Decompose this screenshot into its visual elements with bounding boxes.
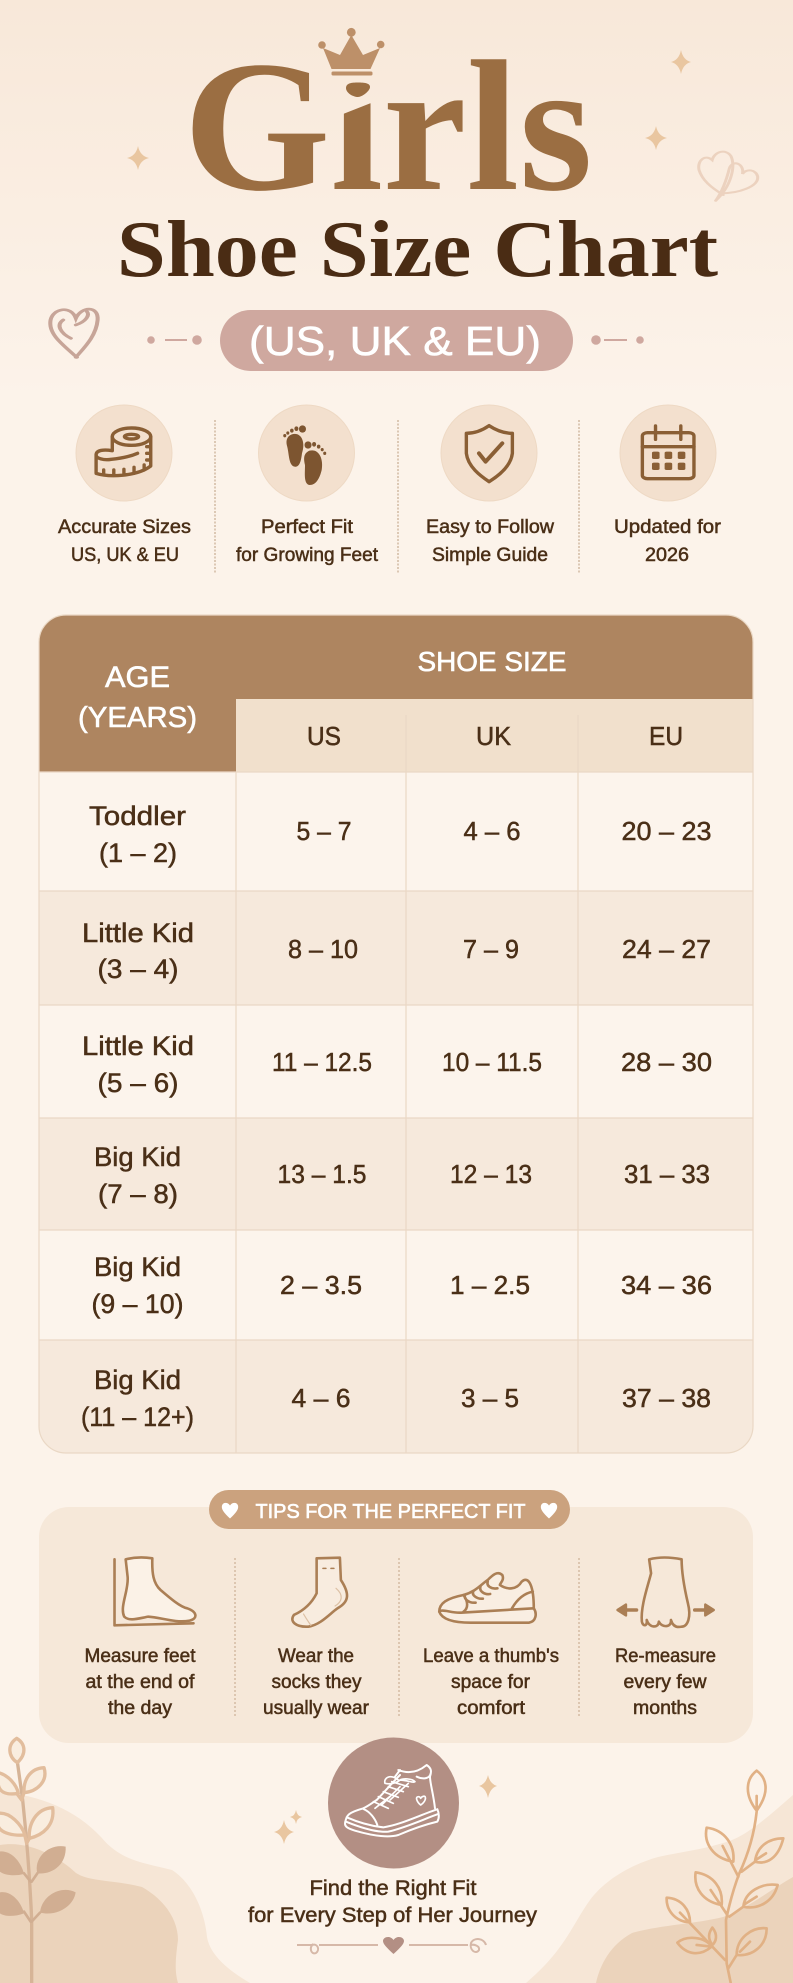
row: big kid 7-8: 13 – 1.5 xyxy=(278,1159,366,1189)
row: big kid 9-10: Big Kid xyxy=(94,1252,181,1282)
size table xyxy=(39,615,753,1453)
header: US UK EU xyxy=(307,721,683,751)
row: little kid 5-6: 28 – 30 xyxy=(621,1047,712,1077)
icon: sparkle bottom left xyxy=(274,1820,294,1844)
subtitle pill xyxy=(220,310,573,371)
row: little kid 3-4: 7 – 9 xyxy=(463,934,519,964)
header: age: (YEARS) xyxy=(78,702,197,734)
icon: sock xyxy=(292,1558,347,1627)
feature: accurate sizes xyxy=(58,405,191,566)
tip: socks xyxy=(263,1558,370,1719)
text: accurate sizes: US, UK & EU xyxy=(71,545,179,566)
text: socks: Wear the xyxy=(278,1646,354,1667)
icon: calendar xyxy=(642,426,694,479)
tip: measure feet xyxy=(84,1557,196,1719)
icon: sparkle bottom right xyxy=(479,1775,497,1798)
header: US UK EU: UK xyxy=(476,721,512,751)
row: big kid 11-12+: (11 – 12+) xyxy=(81,1402,194,1432)
text: socks: socks they xyxy=(272,1672,362,1693)
icon: crown over the i xyxy=(318,20,386,116)
row: toddler xyxy=(89,801,712,868)
text: perfect fit: Perfect Fit xyxy=(261,517,354,538)
row: big kid 9-10 xyxy=(92,1252,712,1319)
text: measure feet xyxy=(84,1646,196,1719)
tips heading pill: TIPS FOR THE PERFECT FIT xyxy=(256,1501,526,1523)
closing message xyxy=(248,1877,538,1927)
row: big kid 9-10: 34 – 36 xyxy=(621,1270,712,1300)
icon: sparkle left xyxy=(127,146,149,170)
table backgrounds and grid xyxy=(39,615,753,1453)
header: shoe size: SHOE SIZE xyxy=(418,646,566,677)
row: big kid 9-10: 2 – 3.5 xyxy=(280,1270,362,1300)
text: updated for 2026 xyxy=(614,517,722,566)
row: little kid 3-4 xyxy=(82,918,711,984)
text: updated for 2026: Updated for xyxy=(614,517,722,538)
text: re-measure: months xyxy=(633,1698,697,1719)
row: toddler: Toddler xyxy=(89,801,186,831)
closing message: Find the Right Fit xyxy=(310,1877,477,1900)
row: big kid 11-12+: 3 – 5 xyxy=(461,1383,519,1413)
text: easy to follow xyxy=(426,517,554,566)
icon: foot against ruler xyxy=(115,1557,195,1625)
icon: foot with arrows xyxy=(618,1558,714,1627)
text: socks xyxy=(263,1646,370,1719)
row: little kid 5-6: (5 – 6) xyxy=(98,1068,178,1098)
icon: high-top sneaker xyxy=(345,1765,439,1836)
row: toddler: 4 – 6 xyxy=(464,816,520,846)
row: big kid 9-10: (9 – 10) xyxy=(92,1289,184,1319)
row: big kid 7-8: Big Kid xyxy=(94,1142,181,1172)
badge: shoe circle xyxy=(328,1738,459,1868)
text: re-measure: Re-measure xyxy=(615,1646,716,1667)
text: thumb space xyxy=(423,1646,559,1719)
icon: sparkle right xyxy=(645,126,667,150)
feature: easy to follow xyxy=(426,405,554,566)
subtitle pill: (US, UK & EU) xyxy=(249,318,541,364)
icon: measuring tape xyxy=(96,428,151,476)
background blobs: bottom left xyxy=(0,1792,250,1983)
row: little kid 3-4: Little Kid xyxy=(82,918,194,948)
row: big kid 11-12+: 4 – 6 xyxy=(292,1383,350,1413)
feature: perfect fit xyxy=(236,405,379,566)
plant: left branch xyxy=(0,1738,76,1983)
row: little kid 5-6: 10 – 11.5 xyxy=(442,1047,542,1077)
header: US UK EU: EU xyxy=(649,721,683,751)
title: Girls: Girls xyxy=(183,23,593,230)
icon: double heart outline xyxy=(699,152,758,201)
row: little kid 5-6: 11 – 12.5 xyxy=(272,1047,372,1077)
row: little kid 5-6 xyxy=(82,1031,712,1098)
row: toddler: (1 – 2) xyxy=(99,838,177,868)
row: little kid 3-4: 8 – 10 xyxy=(288,934,358,964)
ornament: right of subtitle xyxy=(591,335,644,345)
ornament: left of subtitle xyxy=(147,335,202,345)
text: perfect fit xyxy=(236,517,379,566)
text: measure feet: at the end of xyxy=(86,1672,195,1693)
text: thumb space: space for xyxy=(451,1672,531,1693)
title: Shoe Size Chart: Shoe Size Chart xyxy=(117,206,718,294)
row: big kid 7-8: 12 – 13 xyxy=(450,1159,532,1189)
tips heading pill xyxy=(209,1490,570,1529)
row: big kid 7-8 xyxy=(94,1142,710,1209)
row: toddler: 20 – 23 xyxy=(622,816,712,846)
text: thumb space: Leave a thumb's xyxy=(423,1646,559,1667)
text: thumb space: comfort xyxy=(457,1698,526,1719)
row: toddler: 5 – 7 xyxy=(296,816,352,846)
background blobs: bottom right xyxy=(526,1795,793,1983)
icon: sparkle top right xyxy=(671,50,691,74)
ornament: heart divider xyxy=(297,1937,486,1954)
header: US UK EU: US xyxy=(307,721,341,751)
panel: tips xyxy=(39,1490,753,1743)
row: big kid 11-12+: 37 – 38 xyxy=(622,1383,711,1413)
text: measure feet: the day xyxy=(108,1698,173,1719)
text: socks: usually wear xyxy=(263,1698,370,1719)
text: perfect fit: for Growing Feet xyxy=(236,545,379,566)
plant: right branch xyxy=(667,1771,783,1983)
row: big kid 9-10: 1 – 2.5 xyxy=(450,1270,530,1300)
text: accurate sizes xyxy=(58,517,191,566)
row: big kid 7-8: (7 – 8) xyxy=(98,1179,178,1209)
row: big kid 11-12+: Big Kid xyxy=(94,1365,181,1395)
text: measure feet: Measure feet xyxy=(84,1646,196,1667)
header: age xyxy=(78,661,197,734)
text: re-measure xyxy=(615,1646,716,1719)
text: updated for 2026: 2026 xyxy=(645,545,689,566)
icon: footprints xyxy=(283,425,326,485)
closing message: for Every Step of Her Journey xyxy=(248,1904,538,1927)
row: big kid 11-12+ xyxy=(81,1365,711,1432)
text: re-measure: every few xyxy=(624,1672,707,1693)
row: little kid 3-4: (3 – 4) xyxy=(98,954,178,984)
icon: hand drawn heart xyxy=(50,309,98,357)
icon: small sparkle bottom left xyxy=(290,1810,302,1824)
tip: re-measure xyxy=(615,1558,716,1719)
row: big kid 7-8: 31 – 33 xyxy=(624,1159,710,1189)
icon: sneaker xyxy=(439,1573,536,1623)
text: accurate sizes: Accurate Sizes xyxy=(58,517,191,538)
row: little kid 3-4: 24 – 27 xyxy=(622,934,711,964)
tip: thumb space xyxy=(423,1573,559,1719)
text: easy to follow: Easy to Follow xyxy=(426,517,554,538)
text: easy to follow: Simple Guide xyxy=(432,545,548,566)
icon: shield check xyxy=(466,426,512,482)
row: little kid 5-6: Little Kid xyxy=(82,1031,194,1061)
header: age: AGE xyxy=(105,661,170,694)
feature: updated for 2026 xyxy=(614,405,722,566)
